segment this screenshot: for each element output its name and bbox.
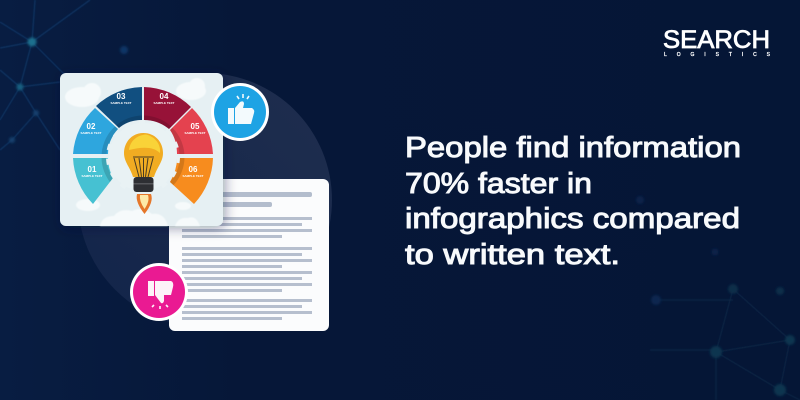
segment 03: 03 bbox=[117, 92, 126, 101]
headline: 70% faster in bbox=[405, 168, 592, 200]
segment 05 bbox=[170, 108, 213, 154]
segment 01: 01 bbox=[88, 165, 97, 174]
document heading bars bbox=[182, 192, 312, 207]
segment 03 bbox=[96, 87, 142, 128]
rocket flame bbox=[137, 194, 152, 214]
segment 01: SAMPLE TEXT bbox=[81, 174, 103, 178]
segment 03: SAMPLE TEXT bbox=[110, 101, 132, 105]
segment 02: 02 bbox=[87, 122, 96, 131]
segment 05: SAMPLE TEXT bbox=[184, 131, 206, 135]
logo: SEARCH bbox=[663, 26, 770, 54]
segment 01 bbox=[73, 158, 113, 204]
network pattern: top left bbox=[0, 0, 128, 150]
infographic card bbox=[60, 73, 223, 226]
badge: thumbs down bbox=[130, 263, 188, 321]
segment 06: SAMPLE TEXT bbox=[182, 174, 204, 178]
segment 04: 04 bbox=[160, 92, 169, 101]
icon: thumbs down bbox=[148, 281, 173, 309]
light bulb bbox=[124, 133, 163, 214]
segment 04 bbox=[144, 87, 191, 129]
network pattern: bottom right bbox=[636, 196, 800, 400]
segment 05: 05 bbox=[191, 122, 200, 131]
headline: to written text. bbox=[405, 239, 620, 271]
clouds bbox=[65, 78, 206, 226]
segment 04: SAMPLE TEXT bbox=[153, 101, 175, 105]
segment inner shading bbox=[104, 118, 182, 196]
background disc bbox=[78, 73, 332, 327]
segment 06 bbox=[170, 158, 213, 204]
segment 02: SAMPLE TEXT bbox=[80, 131, 102, 135]
headline bbox=[405, 132, 741, 271]
segment 06: 06 bbox=[189, 165, 198, 174]
logo: LOGISTICS bbox=[664, 52, 771, 58]
document body lines bbox=[182, 217, 312, 320]
text document bbox=[169, 179, 329, 331]
headline: People find information bbox=[405, 132, 741, 164]
badge: thumbs up bbox=[211, 83, 269, 141]
gear bbox=[108, 122, 178, 192]
headline: infographics compared bbox=[405, 203, 740, 235]
icon: thumbs up bbox=[228, 94, 254, 124]
segment 02 bbox=[73, 108, 118, 154]
